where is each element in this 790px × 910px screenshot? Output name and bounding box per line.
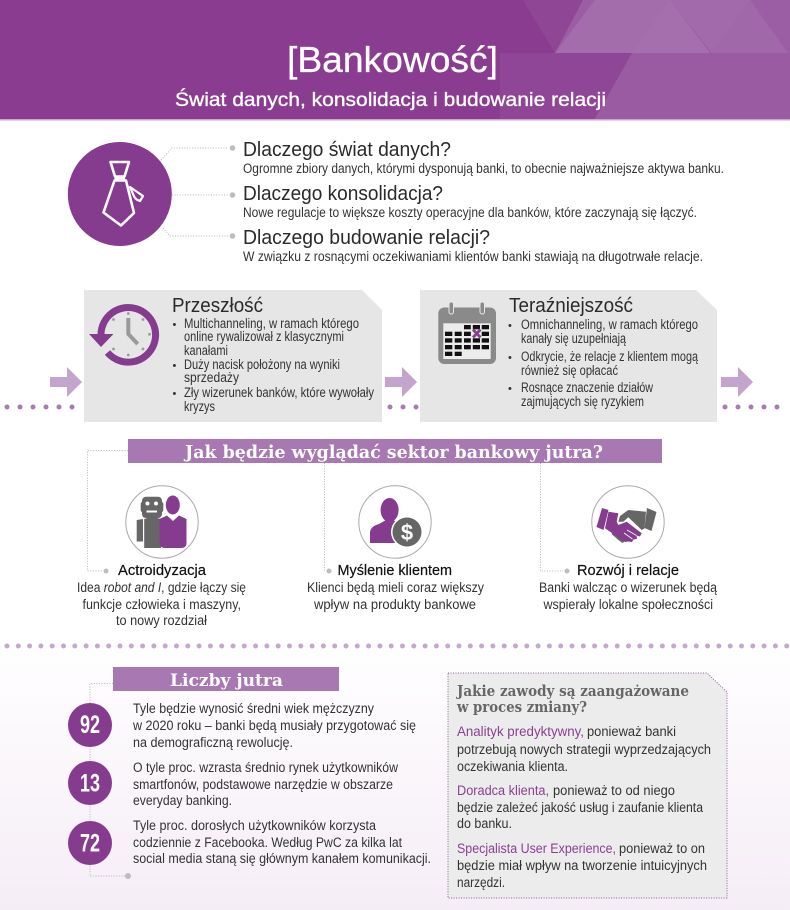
stat: 92: w 2020 roku – banki będą musiały przygotować się: [132, 718, 416, 733]
column text: [307, 580, 484, 612]
column title: Rozwój i relacje: [577, 562, 679, 579]
heading band: tomorrow: Jak będzie wyglądać sektor bankowy jutra?: [183, 442, 603, 463]
column text: wpływ na produkty bankowe: [313, 597, 476, 612]
column text: wspierały lokalne społeczności: [543, 597, 713, 612]
intro question 3: Dlaczego budowanie relacji?: [243, 226, 490, 249]
bullet list: present: •: [508, 320, 512, 332]
icon: client with dollar coin: [359, 486, 431, 558]
bullet list: present: [508, 317, 698, 409]
column title: Actroidyzacja: [118, 562, 207, 579]
panel: professions: [448, 673, 727, 898]
profession: client advisor: do banku.: [457, 816, 512, 831]
arrow 3: [721, 367, 753, 397]
stat: 72: codziennie z Facebooka. Według PwC za kilka lat: [133, 835, 402, 850]
stat: 72: Tyle proc. dorosłych użytkowników korzysta: [133, 818, 376, 833]
stat: 92: 92: [80, 711, 100, 739]
profession: client advisor: będzie zależeć jakość usług i zaufanie klienta: [457, 800, 703, 815]
bullet list: present: •: [508, 352, 512, 364]
column text: Klienci będą mieli coraz większy: [307, 580, 484, 595]
intro question 1: [243, 138, 724, 176]
column: customer thinking: [307, 486, 484, 612]
icon: robot and person: [126, 486, 198, 558]
panel heading: present: Teraźniejszość: [509, 294, 633, 317]
heading band: numbers: Liczby jutra: [170, 671, 283, 690]
bullet list: present: Omnichanneling, w ramach którego: [521, 317, 698, 332]
bullet list: past: kanałami: [184, 343, 228, 358]
subtitle: Świat danych, konsolidacja i budowanie relacji: [175, 87, 606, 111]
bullet list: past: kryzys: [184, 399, 215, 414]
icon: handshake: [592, 486, 664, 558]
column: growth and relations: [539, 486, 717, 612]
intro question 3: [243, 226, 703, 264]
bullet list: present: Odkrycie, że relacje z klientem mogą: [521, 349, 698, 364]
connector: numbers: [90, 684, 131, 879]
panel heading: professions: Jakie zawody są zaangażowane: [455, 683, 689, 700]
column text: [77, 580, 246, 628]
bullet list: past: online rywalizował z klasycznymi: [184, 329, 344, 344]
bullet list: present: •: [508, 383, 512, 395]
profession: predictive analyst: ponieważ banki: [587, 724, 676, 739]
intro question 3: W związku z rosnącymi oczekiwaniami klientów banki stawiają na długotrwałe relacje.: [243, 249, 703, 264]
profession: UX specialist: będzie miał wpływ na tworzenie intuicyjnych: [457, 858, 707, 873]
stat: 92: [68, 701, 416, 750]
header banner: [0, 0, 790, 120]
icon: tie in purple circle: [68, 142, 172, 246]
panel heading: professions: [455, 683, 689, 716]
stat: 72: 72: [80, 830, 100, 858]
intro question 1: Ogromne zbiory danych, którymi dysponują banki, to obecnie najważniejsze aktywa banku.: [243, 161, 724, 176]
stat: 72: [68, 818, 431, 866]
panel: present: [420, 290, 717, 422]
arrow 1: [50, 367, 82, 397]
icon: calendar: [438, 302, 496, 364]
dotted timeline: [7, 404, 786, 410]
stat: 13: everyday banking.: [133, 793, 232, 808]
profession: UX specialist: narzędzi.: [457, 875, 505, 890]
stat: 13: smartfonów, podstawowe narzędzie w obszarze: [133, 777, 393, 792]
bullet list: past: Zły wizerunek banków, które wywołały: [184, 385, 374, 400]
column: actroidization: [77, 486, 246, 628]
profession: predictive analyst: potrzebują nowych strategii wyprzedzających: [457, 742, 711, 757]
profession: UX specialist: Specjalista User Experience,: [457, 841, 616, 856]
profession: UX specialist: [457, 841, 707, 890]
profession: UX specialist: ponieważ to on: [619, 841, 705, 856]
panel: past: [84, 290, 382, 422]
connectors: intro questions: [161, 145, 235, 239]
intro question 1: Dlaczego świat danych?: [243, 138, 451, 161]
stat: 13: 13: [80, 770, 100, 798]
column text: funkcje człowieka i maszyny,: [82, 597, 241, 612]
profession: client advisor: Doradca klienta,: [457, 783, 549, 798]
bullet list: present: również się opłacać: [521, 363, 618, 378]
bullet list: past: •: [172, 319, 176, 331]
bullet list: past: •: [172, 388, 176, 400]
profession: client advisor: ponieważ to od niego: [553, 783, 675, 798]
bullet list: past: sprzedaży: [184, 370, 239, 385]
connectors: tomorrow section: [88, 450, 570, 574]
icon: client with dollar coin: $: [401, 520, 413, 545]
column text: Idea robot and I, gdzie łączy się: [77, 580, 246, 595]
profession: predictive analyst: Analityk predyktywny,: [457, 724, 584, 739]
icon: clock with back arrow: [89, 308, 156, 362]
bullet list: past: Multichanneling, w ramach którego: [184, 316, 359, 331]
column text: to nowy rozdział: [116, 613, 207, 628]
bullet list: past: [172, 316, 374, 414]
heading band: numbers: [113, 667, 339, 691]
panel heading: past: Przeszłość: [172, 294, 263, 317]
dotted divider: [7, 644, 790, 648]
profession: predictive analyst: oczekiwania klienta.: [457, 759, 568, 774]
bullet list: past: •: [172, 360, 176, 372]
stat: 92: na demograficzną rewolucję.: [133, 735, 293, 750]
stat: 92: Tyle będzie wynosić średni wiek mężczyzny: [133, 701, 374, 716]
stat: 13: O tyle proc. wzrasta średnio rynek użytkowników: [133, 760, 398, 775]
column title: Myślenie klientem: [338, 562, 452, 579]
intro question 2: Dlaczego konsolidacja?: [243, 182, 443, 205]
profession: client advisor: [457, 783, 703, 831]
title: [Bankowość]: [287, 39, 498, 80]
bullet list: present: Rosnące znaczenie działów: [521, 380, 653, 395]
column text: [539, 580, 717, 612]
bullet list: past: Duży nacisk położony na wyniki: [184, 357, 340, 372]
stat: 13: [68, 760, 398, 808]
arrow 2: [385, 367, 417, 397]
intro question 2: [243, 182, 697, 220]
panel heading: professions: w proces zmiany?: [456, 699, 587, 716]
stat: 72: social media staną się głównym kanałem komunikacji.: [133, 851, 431, 866]
profession: predictive analyst: [457, 724, 711, 774]
bullet list: present: kanały się uzupełniają: [521, 331, 626, 346]
bullet list: present: zajmujących się ryzykiem: [521, 394, 644, 409]
column text: Banki walcząc o wizerunek będą: [539, 580, 717, 595]
intro question 2: Nowe regulacje to większe koszty operacyjne dla banków, które zaczynają się łączyć.: [243, 205, 697, 220]
